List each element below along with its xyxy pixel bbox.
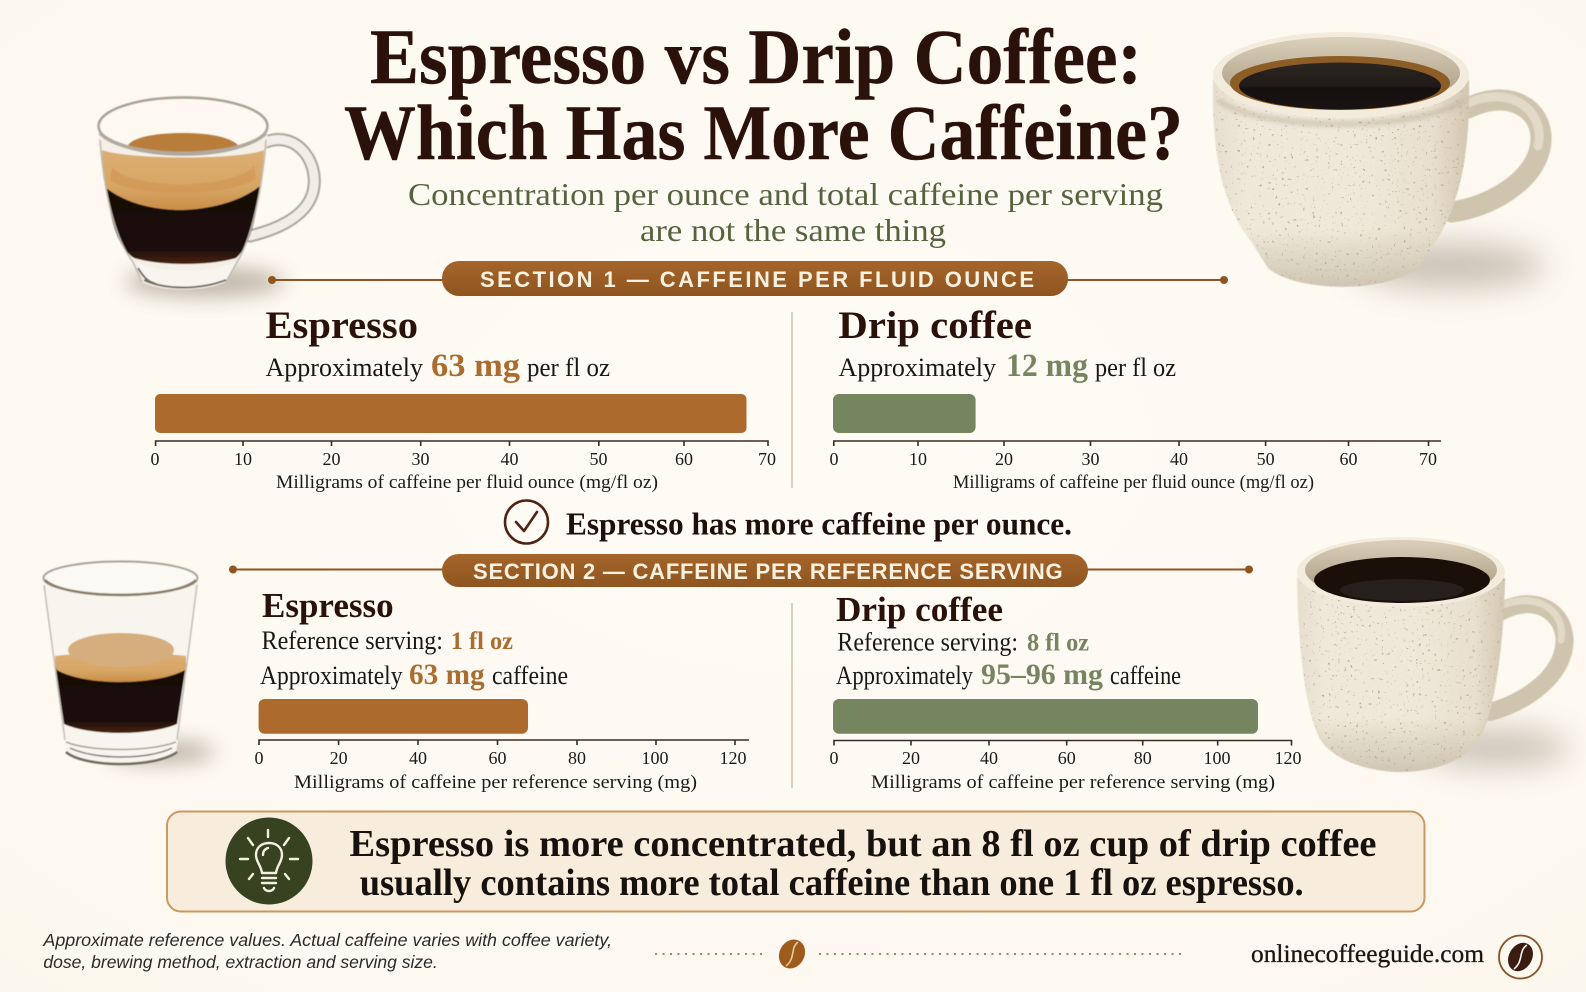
photo: large ceramic drip coffee cup xyxy=(1213,32,1545,288)
panel: espresso per fluid ounce: Espresso xyxy=(266,304,418,347)
photo: drip coffee mug xyxy=(1297,537,1570,772)
axis: milligrams per fluid ounce: 40 xyxy=(1170,449,1188,469)
footer divider with bean xyxy=(655,935,1183,973)
espresso caffeine per serving: Approximately xyxy=(260,661,402,690)
panel: espresso per reference serving: Espresso xyxy=(262,586,394,625)
takeaway: espresso per ounce: Espresso has more caffeine per ounce. xyxy=(566,506,1072,542)
axis: milligrams per fluid ounce: 60 xyxy=(675,449,693,469)
photo: espresso in shot glass xyxy=(43,562,215,764)
axis: milligrams per reference serving: 100 xyxy=(1204,748,1230,768)
axis: milligrams per fluid ounce: 0 xyxy=(830,449,838,469)
callout text xyxy=(350,823,1376,904)
logo: coffee bean xyxy=(1499,936,1542,978)
espresso concentration value: per fl oz xyxy=(527,353,610,382)
icon: light bulb xyxy=(226,818,312,904)
section 2 banner: SECTION 2 — CAFFEINE PER REFERENCE SERVING xyxy=(473,559,1063,584)
callout text: usually contains more total caffeine than one 1 fl oz espresso. xyxy=(360,862,1304,904)
subtitle xyxy=(408,176,1163,248)
drip concentration value xyxy=(838,348,1176,384)
axis: milligrams per reference serving: 80 xyxy=(1134,748,1152,768)
panel: espresso per reference serving xyxy=(254,586,749,793)
espresso reference serving: Reference serving: xyxy=(262,626,443,655)
bar: espresso 63 mg per fl oz xyxy=(155,394,746,433)
espresso concentration value: Approximately xyxy=(266,353,423,382)
axis: milligrams per fluid ounce: 0 xyxy=(150,449,160,469)
drip caffeine per serving: caffeine xyxy=(1110,661,1181,690)
panel: espresso per fluid ounce xyxy=(150,304,776,493)
espresso concentration value xyxy=(266,348,610,384)
axis: milligrams per fluid ounce: 10 xyxy=(909,449,927,469)
footnote: Approximate reference values. Actual caffeine varies with coffee variety, xyxy=(42,930,612,950)
axis: milligrams per reference serving: 80 xyxy=(568,748,586,768)
panel: drip coffee per reference serving xyxy=(830,590,1302,793)
panel: drip coffee per reference serving: Drip coffee xyxy=(836,590,1003,629)
drip caffeine per serving xyxy=(836,658,1181,691)
bar: drip 12 mg per fl oz xyxy=(833,394,976,433)
callout: key takeaway xyxy=(167,812,1424,912)
drip concentration value: 12 mg xyxy=(1006,348,1088,384)
panel: drip coffee per fluid ounce xyxy=(830,304,1441,493)
axis: milligrams per reference serving: 120 xyxy=(1274,748,1302,768)
axis: milligrams per reference serving: 20 xyxy=(902,748,920,768)
drip reference serving: 8 fl oz xyxy=(1027,630,1089,656)
axis: milligrams per fluid ounce: 70 xyxy=(1419,449,1437,469)
axis: milligrams per fluid ounce: 30 xyxy=(1082,449,1100,469)
footnote: dose, brewing method, extraction and serving size. xyxy=(43,952,438,972)
axis: milligrams per fluid ounce: 10 xyxy=(234,449,252,469)
bar: espresso 63 mg per serving xyxy=(259,699,528,734)
photo: espresso in glass cup xyxy=(98,98,314,297)
drip concentration value: per fl oz xyxy=(1095,353,1176,382)
icon: check circle xyxy=(505,500,548,544)
axis: milligrams per reference serving: 40 xyxy=(980,748,998,768)
axis: milligrams per reference serving xyxy=(830,740,1302,793)
drip caffeine per serving: Approximately xyxy=(836,661,973,690)
footnote xyxy=(42,930,612,972)
title: Which Has More Caffeine? xyxy=(344,89,1183,176)
axis: milligrams per fluid ounce: Milligrams of caffeine per fluid ounce (mg/fl oz) xyxy=(276,473,658,493)
drip caffeine per serving: 95–96 mg xyxy=(981,658,1103,691)
axis: milligrams per fluid ounce: 20 xyxy=(322,449,340,469)
axis: milligrams per reference serving: 100 xyxy=(642,748,668,768)
axis: milligrams per reference serving: Milligrams of caffeine per reference serving (mg) xyxy=(294,773,697,793)
axis: milligrams per reference serving: 20 xyxy=(330,748,348,768)
panel: drip coffee per fluid ounce: Drip coffee xyxy=(838,304,1032,347)
axis: milligrams per reference serving xyxy=(254,740,749,793)
axis: milligrams per fluid ounce: 60 xyxy=(1340,449,1358,469)
title: Espresso vs Drip Coffee: xyxy=(370,13,1142,100)
subtitle: Concentration per ounce and total caffeine per serving xyxy=(408,176,1163,212)
espresso caffeine per serving: caffeine xyxy=(492,661,568,690)
axis: milligrams per fluid ounce xyxy=(150,441,776,493)
axis: milligrams per fluid ounce: 50 xyxy=(590,449,608,469)
axis: milligrams per reference serving: 60 xyxy=(488,748,506,768)
callout text: Espresso is more concentrated, but an 8 fl oz cup of drip coffee xyxy=(350,823,1376,865)
drip reference serving: Reference serving: xyxy=(837,628,1018,656)
axis: milligrams per fluid ounce xyxy=(830,441,1441,493)
axis: milligrams per reference serving: 40 xyxy=(409,748,427,768)
section 1 banner xyxy=(268,261,1228,296)
axis: milligrams per reference serving: 0 xyxy=(830,748,838,768)
espresso reference serving: 1 fl oz xyxy=(451,628,513,655)
axis: milligrams per reference serving: 0 xyxy=(254,748,264,768)
axis: milligrams per fluid ounce: 70 xyxy=(758,449,776,469)
section 1 banner: SECTION 1 — CAFFEINE PER FLUID OUNCE xyxy=(480,267,1034,292)
axis: milligrams per fluid ounce: 20 xyxy=(995,449,1013,469)
axis: milligrams per reference serving: Milligrams of caffeine per reference serving (mg) xyxy=(871,773,1275,793)
espresso caffeine per serving: 63 mg xyxy=(409,658,485,691)
axis: milligrams per fluid ounce: 50 xyxy=(1257,449,1275,469)
espresso caffeine per serving xyxy=(260,658,568,691)
drip concentration value: Approximately xyxy=(838,353,996,382)
website: onlinecoffeeguide.com xyxy=(1251,941,1485,968)
axis: milligrams per fluid ounce: 30 xyxy=(412,449,430,469)
axis: milligrams per reference serving: 120 xyxy=(720,748,746,768)
axis: milligrams per reference serving: 60 xyxy=(1058,748,1076,768)
bar: drip 95-96 mg per serving xyxy=(833,699,1258,734)
section 2 banner xyxy=(229,554,1253,587)
espresso concentration value: 63 mg xyxy=(431,348,521,384)
axis: milligrams per fluid ounce: 40 xyxy=(500,449,518,469)
title xyxy=(344,13,1183,176)
axis: milligrams per fluid ounce: Milligrams of caffeine per fluid ounce (mg/fl oz) xyxy=(953,473,1314,493)
subtitle: are not the same thing xyxy=(640,212,946,248)
